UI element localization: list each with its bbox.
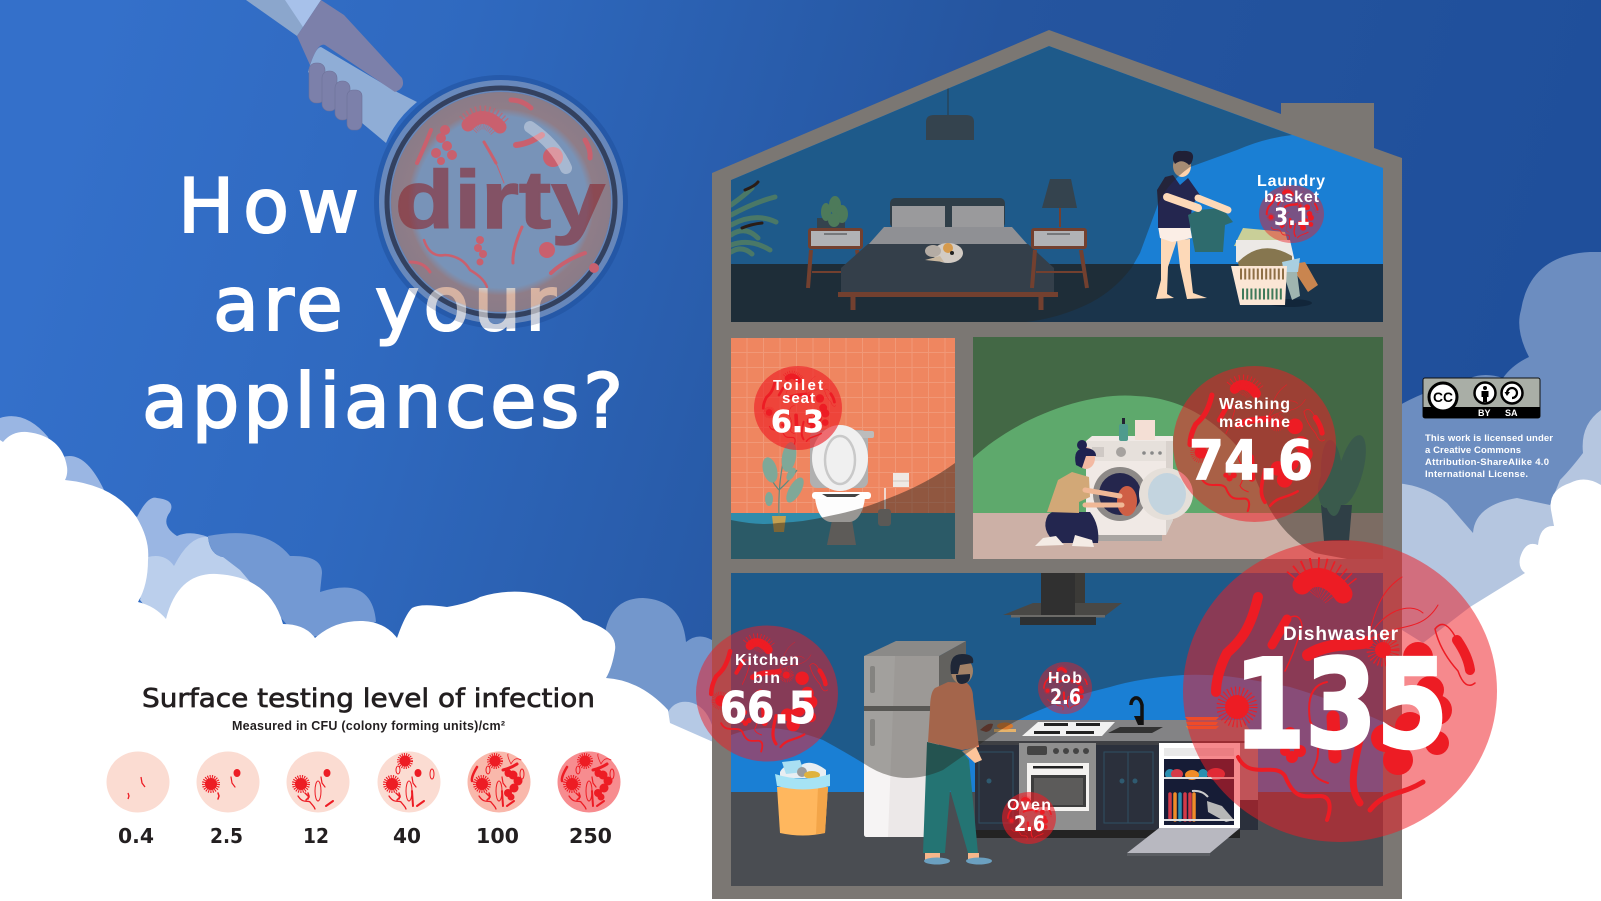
callout: washing machine: Washing bbox=[1219, 396, 1290, 413]
sink and tap bbox=[1108, 698, 1163, 733]
bed bbox=[838, 198, 1058, 310]
right nightstand with lamp bbox=[1031, 179, 1087, 288]
word: dirty: dirty bbox=[395, 155, 605, 246]
icon: creative commons licence badge: SA bbox=[1505, 408, 1518, 418]
callout: dishwasher: Dishwasher bbox=[1283, 624, 1399, 645]
callout: laundry basket: 3.1 bbox=[1274, 203, 1310, 231]
icon: hand holding magnifying glass bbox=[246, 0, 628, 329]
title: How bbox=[178, 162, 359, 250]
licence text: Attribution-ShareAlike 4.0 bbox=[1425, 457, 1549, 468]
callout: hob: 2.6 bbox=[1050, 685, 1081, 709]
man with shirt bbox=[1156, 151, 1233, 299]
legend subtitle: Measured in CFU (colony forming units)/cm² bbox=[232, 719, 505, 733]
scale 2.5 bbox=[196, 752, 260, 812]
panel: laundry room bbox=[973, 337, 1383, 559]
text under lens: are your bbox=[213, 260, 556, 348]
plates and vegetables bbox=[980, 717, 1219, 732]
callout: dishwasher: 135 bbox=[1234, 634, 1448, 776]
scale values bbox=[118, 824, 612, 848]
licence text: International License. bbox=[1425, 469, 1528, 480]
scale values: 40 bbox=[393, 824, 421, 848]
toilet paper bbox=[893, 473, 909, 487]
bin bbox=[775, 760, 830, 836]
cat bbox=[925, 243, 963, 263]
laundry basket bbox=[1231, 228, 1318, 307]
scale 100 bbox=[468, 752, 530, 812]
pendant lamp bbox=[926, 88, 974, 140]
callout: kitchen bin: 66.5 bbox=[720, 683, 816, 734]
left nightstand bbox=[808, 228, 863, 288]
callout: oven: 2.6 bbox=[1014, 812, 1045, 836]
callout: washing machine: 74.6 bbox=[1189, 429, 1313, 492]
callout: hob bbox=[1038, 662, 1092, 714]
title: are your bbox=[213, 260, 556, 348]
spotlight shade bbox=[731, 46, 1292, 322]
callout: toilet seat: seat bbox=[782, 390, 815, 407]
plant on nightstand bbox=[817, 196, 848, 228]
callout: kitchen bin: Kitchen bbox=[735, 652, 799, 669]
fridge bbox=[864, 641, 966, 837]
panel: bedroom bbox=[731, 46, 1383, 322]
callout: toilet seat: 6.3 bbox=[771, 405, 824, 440]
hob bbox=[1022, 722, 1115, 736]
house structure bbox=[712, 30, 1402, 899]
panel: bathroom bbox=[731, 338, 955, 559]
licence text: a Creative Commons bbox=[1425, 445, 1521, 456]
scale values: 0.4 bbox=[118, 824, 154, 848]
title: appliances? bbox=[142, 357, 623, 445]
bottle and box bbox=[1119, 418, 1155, 441]
washing machine bbox=[1086, 436, 1193, 541]
plant pot bbox=[1318, 435, 1366, 541]
legend title: Surface testing level of infection bbox=[142, 684, 595, 714]
scale values: 100 bbox=[476, 824, 519, 848]
lens bacteria bbox=[410, 100, 599, 287]
callout: washing machine: machine bbox=[1219, 414, 1290, 431]
clouds: back layers left bbox=[0, 416, 712, 745]
callout: washing machine bbox=[1173, 366, 1336, 522]
man in kitchen bbox=[923, 654, 992, 864]
icon: creative commons licence badge: CC bbox=[1433, 389, 1453, 405]
callout: hob: Hob bbox=[1048, 670, 1082, 687]
callout: oven bbox=[1002, 792, 1056, 844]
woman bbox=[1035, 440, 1122, 547]
plant bbox=[762, 442, 804, 532]
scale values: 2.5 bbox=[210, 824, 243, 848]
panel: kitchen bbox=[731, 573, 1383, 886]
scale 40 bbox=[378, 752, 440, 812]
toilet brush bbox=[878, 488, 891, 526]
callout: oven: Oven bbox=[1007, 797, 1051, 814]
callout: toilet seat bbox=[754, 366, 842, 450]
dishwasher bbox=[1127, 743, 1258, 856]
callout: laundry basket bbox=[1257, 173, 1325, 243]
text over lens rim: are your bbox=[213, 260, 556, 348]
scale 250 bbox=[558, 752, 620, 812]
callout: toilet seat: Toilet bbox=[773, 377, 823, 394]
icon: creative commons licence badge: BY bbox=[1478, 408, 1491, 418]
lens highlight bbox=[530, 127, 566, 168]
clouds: front white left bbox=[0, 432, 720, 901]
licence text: This work is licensed under bbox=[1425, 433, 1553, 444]
callout: kitchen bin bbox=[696, 626, 838, 762]
scale 0.4 bbox=[106, 752, 170, 812]
licence text bbox=[1425, 433, 1553, 480]
white ground below house bbox=[700, 745, 1420, 901]
legend bbox=[106, 684, 620, 848]
cabinets and counter bbox=[960, 720, 1258, 838]
callout: dishwasher bbox=[1183, 540, 1497, 842]
scale values: 12 bbox=[303, 824, 329, 848]
callout: laundry basket: Laundry bbox=[1257, 173, 1325, 190]
clouds: right bbox=[1395, 252, 1601, 901]
toilet bbox=[810, 425, 874, 545]
callout: laundry basket: basket bbox=[1264, 189, 1320, 206]
scale 12 bbox=[286, 752, 350, 812]
wall plant bbox=[731, 182, 776, 254]
oven bbox=[1019, 743, 1096, 830]
title bbox=[142, 162, 623, 445]
icon: creative commons licence badge bbox=[1423, 378, 1540, 418]
scale values: 250 bbox=[569, 824, 612, 848]
callout: kitchen bin: bin bbox=[753, 670, 780, 687]
extractor hood bbox=[1003, 573, 1122, 625]
